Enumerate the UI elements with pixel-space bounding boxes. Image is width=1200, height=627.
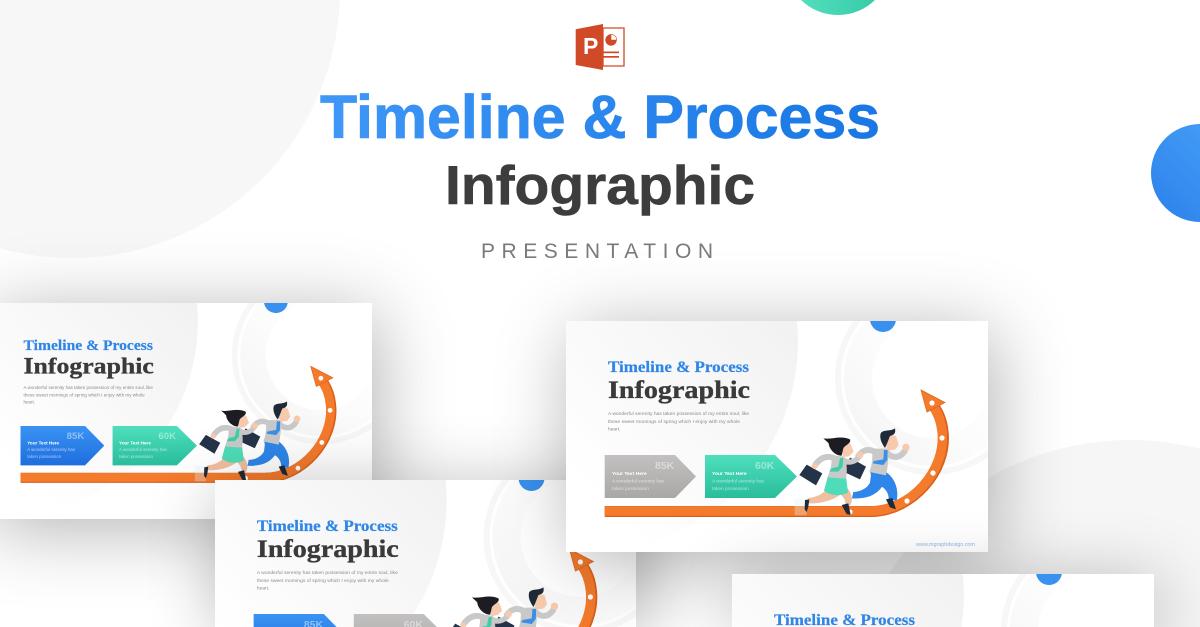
panel: slide preview bottom centre	[215, 480, 636, 627]
slide body text	[24, 385, 153, 404]
slide heading: Timeline & Process	[257, 518, 398, 535]
slide body text: A wonderful serenity has taken possession of my entire soul, like	[608, 411, 749, 417]
slide body text	[608, 411, 749, 433]
slide heading	[257, 518, 399, 563]
panel: slide preview right	[566, 321, 988, 552]
callout: grey 85K: taken possession	[612, 486, 649, 492]
panel: slide preview left	[0, 303, 372, 519]
accent circle: teal top	[801, 0, 875, 15]
slide heading: Infographic	[608, 377, 750, 404]
heading line: Timeline & Process: Timeline & Process	[320, 83, 880, 151]
callout: blue 85K: A wonderful serenity has	[27, 447, 76, 452]
slide body text: A wonderful serenity has taken possession of my entire soul, like	[257, 570, 398, 576]
subtitle: PRESENTATION: PRESENTATION	[481, 240, 713, 263]
slide heading: Timeline & Process	[608, 359, 749, 376]
callout: teal 60K: 60K	[755, 461, 775, 472]
slide heading	[24, 338, 154, 379]
callout: blue 85K: Your Text Here	[27, 440, 60, 445]
callout: blue 85K	[21, 426, 104, 465]
callout: teal 60K: Your Text Here	[712, 471, 747, 477]
slide body text: these sweet mornings of spring which I enjoy with my whole	[608, 419, 740, 425]
callout: teal 60K: A wonderful serenity has	[119, 447, 168, 452]
accent circle: blue right	[1151, 124, 1200, 222]
callout: teal 60K	[705, 455, 797, 498]
title: main heading	[320, 83, 880, 263]
slide body text: these sweet mornings of spring which I enjoy with my whole	[24, 393, 145, 398]
background circle: bottom right	[973, 440, 1200, 627]
callout: blue 85K	[254, 614, 345, 627]
panel: slide preview bottom right	[732, 574, 1154, 627]
arrow and runners illustration	[21, 366, 333, 481]
slide body text: heart.	[24, 399, 35, 404]
callout: teal 60K: taken possession	[712, 486, 749, 492]
slide body text: these sweet mornings of spring which I enjoy with my whole	[257, 578, 389, 584]
slide body text: A wonderful serenity has taken possession of my entire soul, like	[24, 385, 153, 390]
slide heading: Timeline & Process	[24, 338, 153, 354]
icon: PowerPoint logo	[576, 24, 625, 70]
callout: blue 85K: 85K	[67, 431, 84, 442]
callout: teal 60K: A wonderful serenity has	[712, 478, 765, 484]
heading line: Infographic: Infographic	[445, 154, 755, 216]
slide body text: heart.	[257, 585, 269, 592]
icon: PowerPoint logo: P	[583, 33, 598, 59]
background circle: top left	[0, 0, 345, 262]
slide heading: Infographic	[257, 536, 399, 563]
callout: teal 60K: 60K	[158, 431, 176, 442]
callout: teal 60K: Your Text Here	[119, 440, 151, 445]
callout: grey 60K	[354, 614, 446, 627]
callout: grey 85K: A wonderful serenity has	[612, 478, 665, 484]
arrow and runners illustration	[605, 390, 945, 515]
callout: teal 60K: taken possession	[119, 454, 153, 459]
arrow and runners illustration	[254, 549, 593, 627]
callout: teal 60K	[113, 426, 197, 465]
callout: grey 85K	[605, 455, 696, 498]
slide body text	[257, 570, 398, 592]
slide body text: heart.	[608, 427, 620, 433]
slide heading: Infographic	[24, 354, 154, 379]
callout: grey 85K: Your Text Here	[612, 471, 647, 477]
website credit: www.mgraphdesign.com	[915, 542, 975, 548]
callout: blue 85K: taken possession	[27, 454, 62, 459]
slide heading	[608, 359, 750, 404]
callout: grey 85K: 85K	[655, 461, 675, 472]
